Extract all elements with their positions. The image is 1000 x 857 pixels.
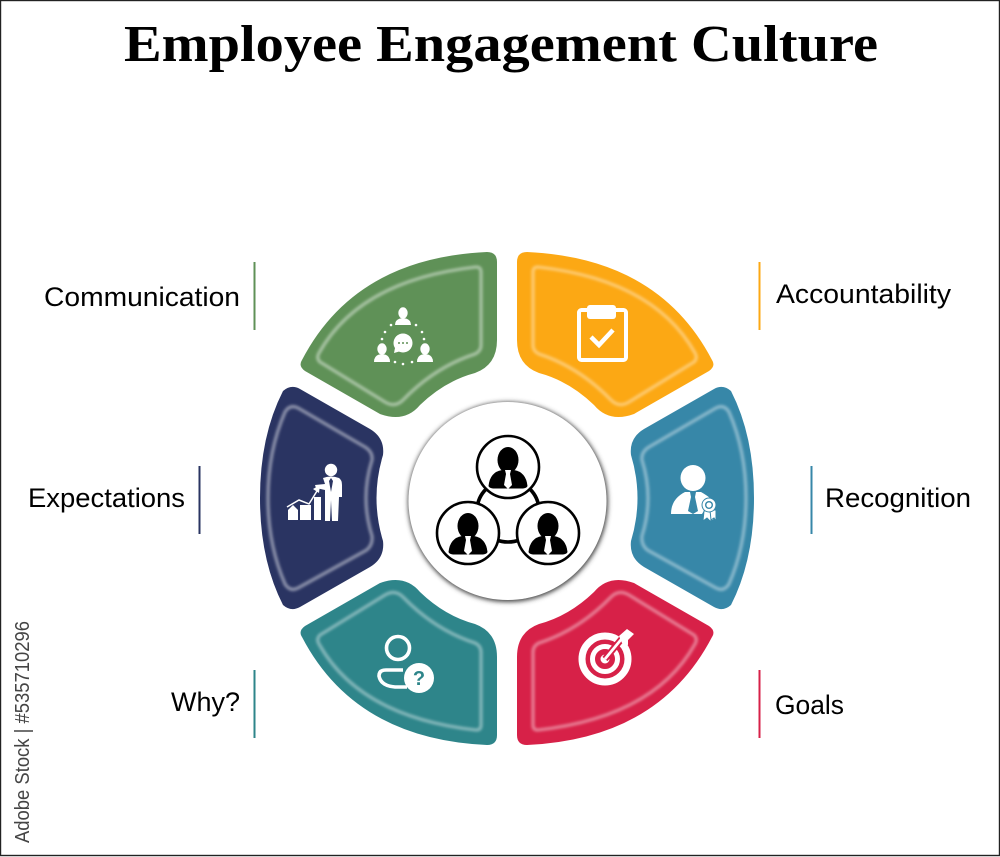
stock id caption: Adobe Stock | #535710296 xyxy=(12,621,34,843)
person: bottom right xyxy=(517,502,579,564)
panel: accountability xyxy=(517,252,713,417)
label: communication: Communication xyxy=(44,282,240,312)
label: accountability: Accountability xyxy=(776,279,952,309)
central circle xyxy=(408,402,608,602)
panel: expectations xyxy=(260,387,383,609)
icon: person with question mark: ? xyxy=(413,668,425,690)
icon: clipboard with check xyxy=(579,305,626,360)
panel: communication xyxy=(301,252,497,417)
label: why: Why? xyxy=(171,687,240,717)
panel: goals xyxy=(517,580,713,745)
label: goals: Goals xyxy=(775,690,844,720)
person: bottom left xyxy=(437,502,499,564)
label: goals xyxy=(758,670,844,738)
icon: person with growth chart xyxy=(287,464,342,521)
label: recognition: Recognition xyxy=(825,483,971,513)
icon: person with question mark xyxy=(379,636,434,693)
title: Employee Engagement Culture xyxy=(124,16,878,73)
person: top xyxy=(477,436,539,498)
icon: employee with award ribbon xyxy=(671,465,716,521)
icon: target with arrow xyxy=(582,629,634,682)
label: expectations: Expectations xyxy=(28,483,185,513)
panel: recognition xyxy=(631,387,754,609)
panel: why xyxy=(301,580,497,745)
label: why xyxy=(171,670,256,738)
icon: people in conversation xyxy=(374,307,433,365)
icon: connected team xyxy=(437,436,579,564)
